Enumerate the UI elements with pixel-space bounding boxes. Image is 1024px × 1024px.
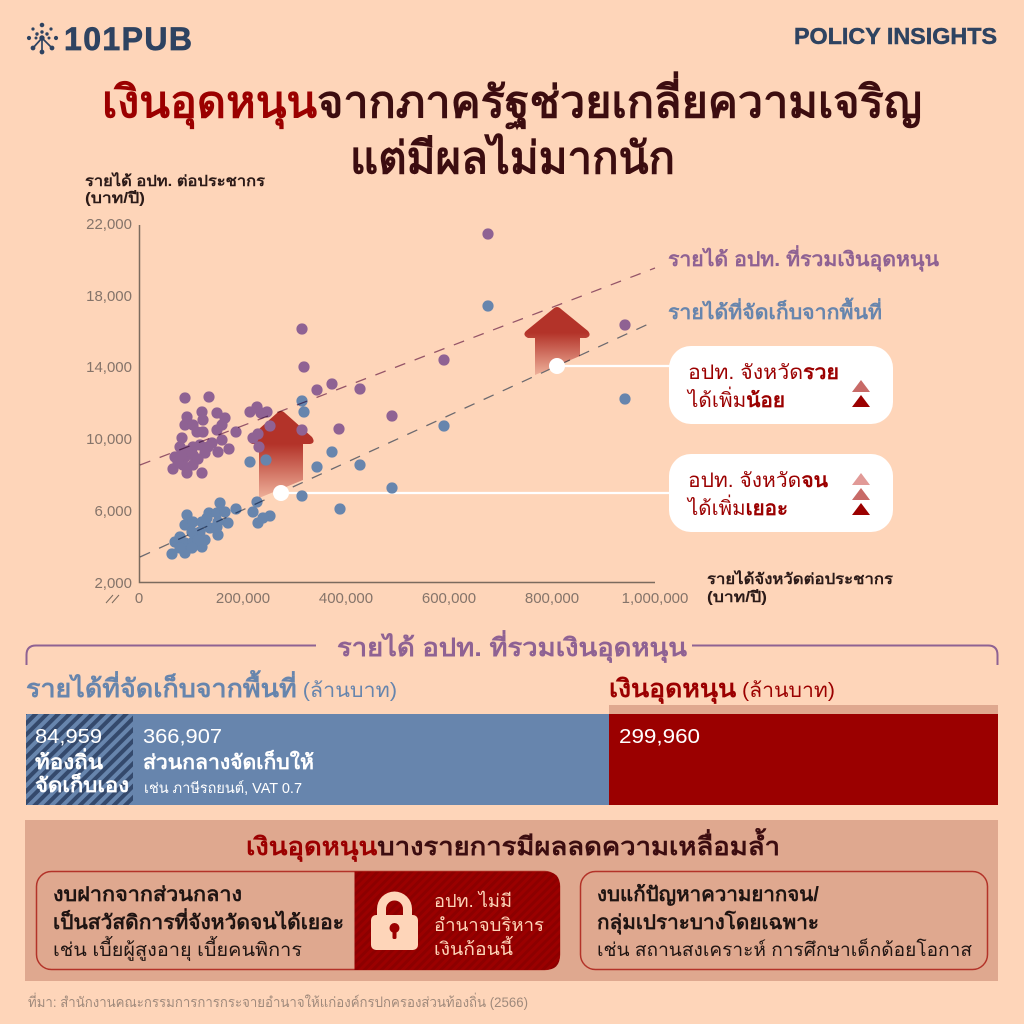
callout: no authority over funds: อปท. ไม่มี <box>434 890 512 911</box>
card: earmarked welfare grants: เช่น เบี้ยผู้สูงอายุ เบี้ยคนพิการ <box>53 936 302 962</box>
y axis title: รายได้ อปท. ต่อประชากร <box>85 171 266 190</box>
backing band above grant <box>609 705 998 715</box>
bar: local collected <box>26 714 133 805</box>
bracket <box>26 646 998 665</box>
x axis ticks: 600,000 <box>422 590 476 607</box>
card: poverty grants: งบแก้ปัญหาความยากจน/ <box>597 883 819 906</box>
card: earmarked welfare grants: งบฝากจากส่วนกลาง <box>53 884 242 906</box>
callout: poor province: อปท. จังหวัด จน <box>688 470 828 492</box>
panel: grants reduce inequality <box>25 820 998 981</box>
y axis ticks: 6,000 <box>94 503 132 520</box>
panel heading: เงินอุดหนุน บางรายการมีผลลดความเหลื่อมล้ำ <box>246 827 780 863</box>
x axis ticks: 200,000 <box>216 590 270 607</box>
title: แต่มีผลไม่มากนัก <box>350 132 675 183</box>
bar: central collected <box>133 714 609 805</box>
y axis ticks <box>86 216 132 592</box>
bar: central collected: ส่วนกลางจัดเก็บให้ <box>143 749 314 774</box>
logo wordmark: 101PUB <box>64 21 192 57</box>
x axis title: รายได้จังหวัดต่อประชากร <box>707 569 894 588</box>
arrow: left gap <box>248 411 314 498</box>
bar: central collected: 366,907 <box>143 726 222 748</box>
icon: padlock <box>371 892 418 950</box>
callout: no authority over funds <box>354 872 560 970</box>
icon: logo network burst <box>27 23 58 54</box>
x axis ticks: 400,000 <box>319 590 373 607</box>
logo: 101PUB <box>27 21 192 57</box>
callout: poor province <box>669 454 893 532</box>
title <box>102 71 922 183</box>
y axis ticks: 2,000 <box>94 575 132 592</box>
source note: ที่มา: สำนักงานคณะกรรมการการกระจายอำนาจให้แก่องค์กรปกครองส่วนท้องถิ่น (2566) <box>28 993 528 1010</box>
heading: own revenue: รายได้ที่จัดเก็บจากพื้นที่ (ล้านบาท) <box>26 669 397 703</box>
card: earmarked welfare grants: เป็นสวัสดิการที่จังหวัดจนได้เยอะ <box>53 907 344 934</box>
line label: total income: รายได้ อปท. ที่รวมเงินอุดหนุน <box>668 244 939 272</box>
callout: rich province: อปท. จังหวัด รวย <box>688 362 839 384</box>
x axis title <box>707 569 894 606</box>
blue dots <box>166 300 631 560</box>
arrow: right gap <box>524 307 590 375</box>
bar: grants: 299,960 <box>619 726 700 748</box>
bar: local collected: ท้องถิ่น <box>35 747 103 774</box>
callout: poor province: ได้เพิ่มเยอะ <box>686 494 788 520</box>
bar: central collected: เช่น ภาษีรถยนต์, VAT 0.7 <box>144 780 302 797</box>
y axis ticks: 10,000 <box>86 431 132 448</box>
x axis ticks: 800,000 <box>525 590 579 607</box>
callout: no authority over funds: เงินก้อนนี้ <box>434 936 513 959</box>
purple dots <box>167 228 631 479</box>
bar: local collected: 84,959 <box>35 726 102 748</box>
x axis ticks: 1,000,000 <box>622 590 688 607</box>
line label: own revenue: รายได้ที่จัดเก็บจากพื้นที่ <box>668 297 882 324</box>
callout: rich province <box>669 346 893 424</box>
marker: rich province <box>549 358 565 374</box>
heading: grants: เงินอุดหนุน (ล้านบาท) <box>609 675 835 705</box>
scatter chart <box>85 171 939 607</box>
trend line: total income <box>140 268 655 465</box>
y axis ticks: 22,000 <box>86 216 132 233</box>
callout: no authority over funds: อำนาจบริหาร <box>434 915 544 935</box>
connector lines <box>281 366 670 493</box>
trend line: own revenue <box>140 321 655 557</box>
x axis ticks <box>135 590 688 607</box>
card: poverty grants: เช่น สถานสงเคราะห์ การศึกษาเด็กด้อยโอกาส <box>597 937 972 961</box>
budget breakdown <box>26 630 998 805</box>
y axis title <box>85 171 266 207</box>
x axis title: (บาท/ปี) <box>707 589 767 606</box>
bar: grants <box>609 714 998 805</box>
marker: poor province <box>273 485 289 501</box>
y axis ticks: 14,000 <box>86 359 132 376</box>
bracket heading: รายได้ อปท. ที่รวมเงินอุดหนุน <box>337 630 687 664</box>
bar: local collected: จัดเก็บเอง <box>35 772 129 797</box>
title: เงินอุดหนุนจากภาครัฐช่วยเกลี่ยความเจริญ <box>102 71 922 130</box>
card: poverty grants <box>580 872 988 970</box>
section label: policy insights: POLICY INSIGHTS <box>794 23 997 49</box>
card: earmarked welfare grants <box>36 872 560 970</box>
axes <box>140 225 655 582</box>
callout: rich province: ได้เพิ่มน้อย <box>686 386 785 412</box>
y axis ticks: 18,000 <box>86 288 132 305</box>
card: poverty grants: กลุ่มเปราะบางโดยเฉพาะ <box>597 910 819 935</box>
x axis ticks: 0 <box>135 590 143 607</box>
y axis title: (บาท/ปี) <box>85 190 145 207</box>
